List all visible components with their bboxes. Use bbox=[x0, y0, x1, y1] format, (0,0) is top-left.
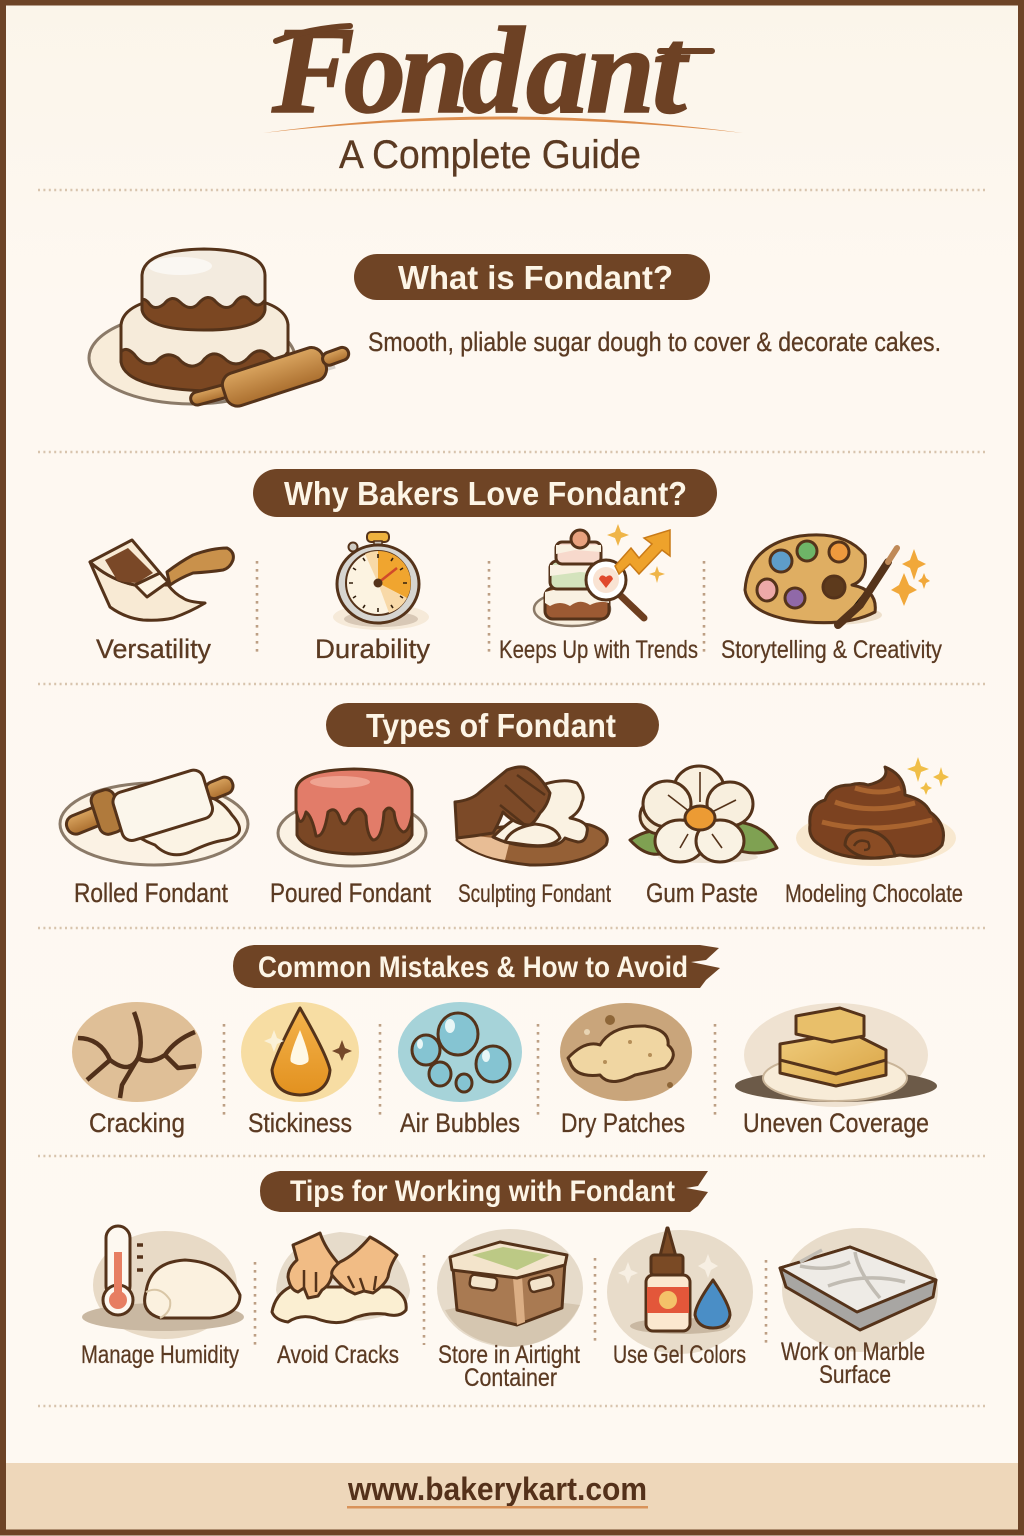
icon: cracked fondant bbox=[72, 1002, 202, 1102]
item: versatility bbox=[90, 540, 233, 664]
label: Surface bbox=[819, 1361, 891, 1389]
icon: cake with poured glaze bbox=[278, 769, 426, 866]
section heading: why bakers love fondant: Why Bakers Love Fondant? bbox=[284, 475, 687, 512]
icon: hands kneading dough bbox=[272, 1232, 410, 1323]
panel: common mistakes bbox=[72, 945, 937, 1138]
label: Store in Airtight bbox=[438, 1341, 580, 1369]
icon: thermometer and dough bbox=[82, 1226, 244, 1339]
title swoosh bbox=[263, 116, 743, 133]
label: Gum Paste bbox=[646, 878, 758, 908]
footer website: www.bakerykart.com bbox=[347, 1471, 647, 1507]
label bbox=[438, 1341, 580, 1392]
label: Storytelling & Creativity bbox=[721, 636, 942, 664]
icon: marble slab bbox=[780, 1228, 938, 1352]
item: stickiness bbox=[241, 1002, 359, 1138]
label: Container bbox=[464, 1364, 557, 1392]
icon: stopwatch bbox=[333, 532, 429, 630]
item: dry patches bbox=[560, 1003, 692, 1138]
section heading: what is fondant: What is Fondant? bbox=[398, 259, 673, 296]
item: uneven coverage bbox=[735, 1003, 937, 1138]
icon: rolling pin on dough bbox=[60, 768, 248, 865]
label: Use Gel Colors bbox=[613, 1341, 746, 1369]
label: Modeling Chocolate bbox=[785, 880, 963, 908]
icon: tiered cake with rolling pin bbox=[89, 249, 351, 409]
label: Work on Marble bbox=[781, 1338, 925, 1366]
section heading: types of fondant: Types of Fondant bbox=[366, 707, 616, 744]
icon: dry patches bbox=[560, 1003, 692, 1101]
subtitle: A Complete Guide bbox=[339, 133, 641, 177]
icon: hand sculpting fondant bbox=[455, 767, 607, 865]
section heading: tips: Tips for Working with Fondant bbox=[290, 1175, 675, 1208]
item: marble surface bbox=[780, 1228, 938, 1389]
label: Avoid Cracks bbox=[277, 1341, 399, 1369]
icon: chocolate swirl bbox=[796, 757, 956, 866]
icon: airtight container bbox=[437, 1229, 583, 1347]
item: poured fondant bbox=[270, 769, 431, 908]
section heading: what is fondant bbox=[354, 254, 710, 300]
icon: spatula bbox=[90, 540, 233, 620]
label: Sculpting Fondant bbox=[458, 880, 611, 908]
item: gum paste bbox=[630, 766, 777, 908]
item: airtight container bbox=[437, 1229, 583, 1392]
icon: sticky drop bbox=[241, 1002, 359, 1102]
icon: uneven stacked cake bbox=[735, 1003, 937, 1107]
icon: gum paste flower bbox=[630, 766, 777, 863]
footer band bbox=[6, 1463, 1018, 1530]
item: storytelling and creativity bbox=[721, 535, 942, 664]
item: modeling chocolate bbox=[785, 757, 963, 908]
item: durability bbox=[315, 532, 430, 664]
title: Fondant bbox=[271, 2, 690, 139]
label: Versatility bbox=[96, 634, 211, 664]
description: Smooth, pliable sugar dough to cover & decorate cakes. bbox=[368, 327, 941, 357]
section heading: common mistakes bbox=[233, 945, 720, 988]
panel: tips bbox=[81, 1171, 938, 1392]
icon: paint palette bbox=[745, 535, 930, 625]
item: gel colors bbox=[607, 1228, 753, 1369]
label: Stickiness bbox=[248, 1108, 352, 1138]
label: Durability bbox=[315, 634, 430, 664]
label: Dry Patches bbox=[561, 1108, 685, 1138]
label: Cracking bbox=[89, 1108, 185, 1138]
section heading: common mistakes: Common Mistakes & How to Avoid bbox=[258, 951, 688, 984]
item: sculpting fondant bbox=[455, 767, 611, 908]
panel: types of fondant bbox=[60, 703, 963, 908]
label bbox=[781, 1338, 925, 1389]
item: avoid cracks bbox=[272, 1232, 410, 1369]
icon: air bubbles bbox=[398, 1002, 522, 1102]
item: cracking bbox=[72, 1002, 202, 1138]
panel: why bakers love fondant bbox=[90, 469, 942, 664]
icon: gel color bottle bbox=[607, 1228, 753, 1354]
label: Air Bubbles bbox=[400, 1108, 520, 1138]
item: manage humidity bbox=[81, 1226, 244, 1369]
icon: cake with magnifier and arrow bbox=[534, 524, 670, 626]
item: air bubbles bbox=[398, 1002, 522, 1138]
label: Uneven Coverage bbox=[743, 1108, 929, 1138]
label: Manage Humidity bbox=[81, 1341, 239, 1369]
label: Rolled Fondant bbox=[74, 878, 228, 908]
item: rolled fondant bbox=[60, 768, 248, 908]
label: Poured Fondant bbox=[270, 878, 431, 908]
section heading: types of fondant bbox=[326, 703, 659, 747]
item: keeps up with trends bbox=[499, 524, 698, 664]
panel: what is fondant bbox=[89, 249, 941, 409]
label: Keeps Up with Trends bbox=[499, 636, 698, 664]
